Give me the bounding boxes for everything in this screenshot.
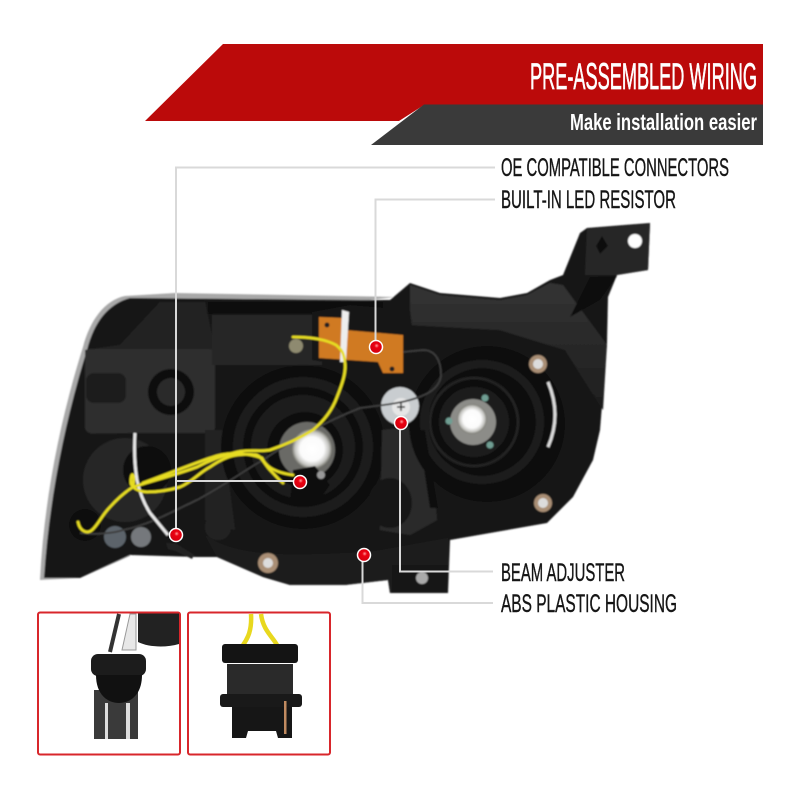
copper terminal [284,701,286,734]
small knob [205,514,231,540]
center projector [221,365,385,529]
headlamp assembly [40,223,650,593]
socket collar [222,644,298,663]
left dark box [85,302,215,434]
marker: resistor [370,340,382,354]
black strut [418,430,438,508]
header banner: red [145,44,763,121]
leader line: beam adjuster [400,423,493,572]
black connector plug [166,543,194,559]
blurred dark background shape [138,614,179,646]
mounting tab [570,224,650,317]
orange LED resistor [312,305,413,380]
marker: beam adjuster [394,416,408,430]
center-right column [380,425,437,535]
yellow wiring [78,337,345,532]
panel: yellow-wire socket [188,612,330,754]
header banner: dark [371,104,763,145]
marker: connector [170,528,182,542]
panel: black connector plug [38,612,180,754]
yellow wires [243,614,277,645]
bolts [258,339,552,584]
lower housing band [205,535,448,593]
housing body [44,223,650,593]
label: built-in LED resistor: BUILT-IN LED RESISTOR [501,186,676,214]
divider column [205,430,235,530]
socket body [227,664,293,695]
lower-left reflector socket [69,438,171,548]
leader line: ABS plastic housing [362,555,493,603]
upper lighter plastic [410,283,607,410]
right projector [409,346,565,502]
lower knob [368,478,412,528]
beam adjuster knob [381,387,419,425]
plug wires [110,614,119,652]
white connector wire [135,433,170,537]
lens edge [40,293,395,580]
marker: bulb socket [294,476,306,488]
leader line: built-in LED resistor [376,200,495,347]
plug collar [91,654,146,676]
label: beam adjuster: BEAM ADJUSTER [501,559,625,587]
leader line: OE compatible connectors [176,168,495,535]
marker: housing [358,548,370,562]
top rail [208,302,383,314]
black wire [80,350,441,534]
label: ABS plastic housing: ABS PLASTIC HOUSING [501,590,677,618]
plug blades [94,690,138,739]
